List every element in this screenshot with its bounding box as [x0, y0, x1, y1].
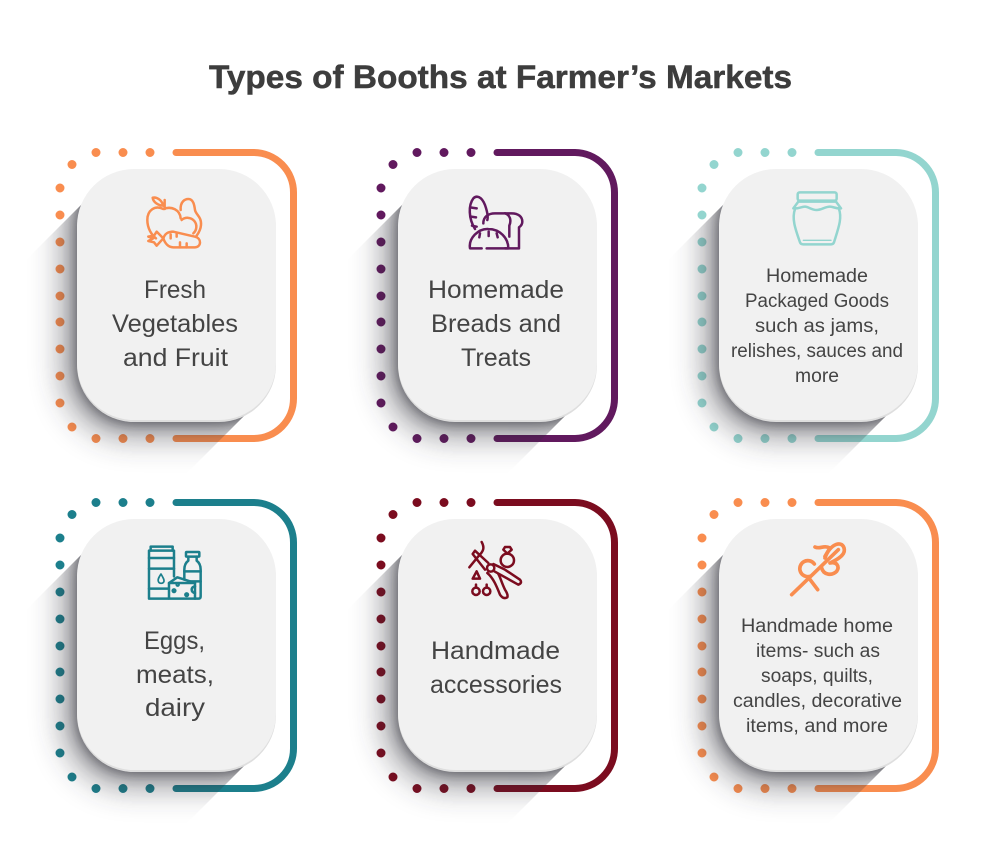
label: handmade accessories — [430, 637, 562, 699]
panel: fresh vegetables and fruit — [56, 148, 294, 442]
label: fresh vegetables and fruit: Fresh — [144, 276, 206, 304]
icon: dairy — [149, 547, 201, 599]
icon: jam jar — [793, 192, 841, 244]
label: homemade packaged goods: relishes, sauces and — [731, 341, 903, 362]
panel: eggs, meats, dairy — [56, 498, 294, 792]
label: eggs, meats, dairy: meats, — [136, 661, 214, 689]
label: handmade accessories: Handmade — [431, 637, 560, 665]
label: homemade breads and treats: Breads and — [431, 310, 561, 338]
label: eggs, meats, dairy: dairy — [145, 694, 206, 722]
label: handmade home items: Handmade home — [741, 616, 893, 637]
panel: handmade home items — [698, 498, 936, 792]
dotted frame: dark teal — [56, 498, 294, 792]
label: homemade breads and treats: Treats — [461, 344, 531, 372]
label: handmade accessories: accessories — [430, 671, 562, 699]
icon: pliers and jewelry — [469, 542, 521, 598]
label: eggs, meats, dairy: Eggs, — [144, 627, 205, 655]
card: fresh vegetables — [63, 156, 290, 437]
icon: needle and thread — [792, 544, 844, 595]
label: homemade breads and treats — [428, 276, 564, 372]
label: fresh vegetables and fruit: and Fruit — [123, 344, 228, 372]
dotted frame: orange — [698, 498, 936, 792]
panel: homemade packaged goods — [698, 148, 936, 442]
card: eggs, meats, dairy — [63, 506, 290, 787]
card: packaged goods — [705, 156, 932, 437]
dotted frame: teal — [698, 148, 936, 442]
label: fresh vegetables and fruit — [112, 276, 238, 372]
dotted frame: purple — [377, 148, 614, 442]
card: breads — [384, 156, 611, 437]
dotted frame: maroon — [377, 498, 614, 792]
label: homemade packaged goods: Homemade — [766, 266, 868, 287]
label: handmade home items: soaps, quilts, — [761, 666, 873, 687]
panel: handmade accessories — [377, 498, 614, 792]
card: handmade home items — [705, 506, 932, 787]
label: homemade packaged goods: more — [795, 366, 839, 387]
label: fresh vegetables and fruit: Vegetables — [112, 310, 238, 338]
label: homemade packaged goods — [731, 266, 903, 387]
panel: homemade breads and treats — [377, 148, 614, 442]
title: Types of Booths at Farmer’s Markets — [209, 59, 792, 95]
label: handmade home items — [733, 616, 902, 737]
label: homemade breads and treats: Homemade — [428, 276, 564, 304]
label: handmade home items: candles, decorative — [733, 691, 902, 712]
label: homemade packaged goods: such as jams, — [755, 316, 879, 337]
label: homemade packaged goods: Packaged Goods — [745, 291, 889, 312]
card: handmade accessories — [384, 506, 611, 787]
label: handmade home items: items- such as — [756, 641, 880, 662]
dotted frame: orange — [56, 148, 294, 442]
icon: fruit and carrot — [147, 197, 201, 247]
icon: breads — [470, 197, 522, 248]
label: eggs, meats, dairy — [136, 627, 214, 722]
label: handmade home items: items, and more — [746, 716, 888, 737]
